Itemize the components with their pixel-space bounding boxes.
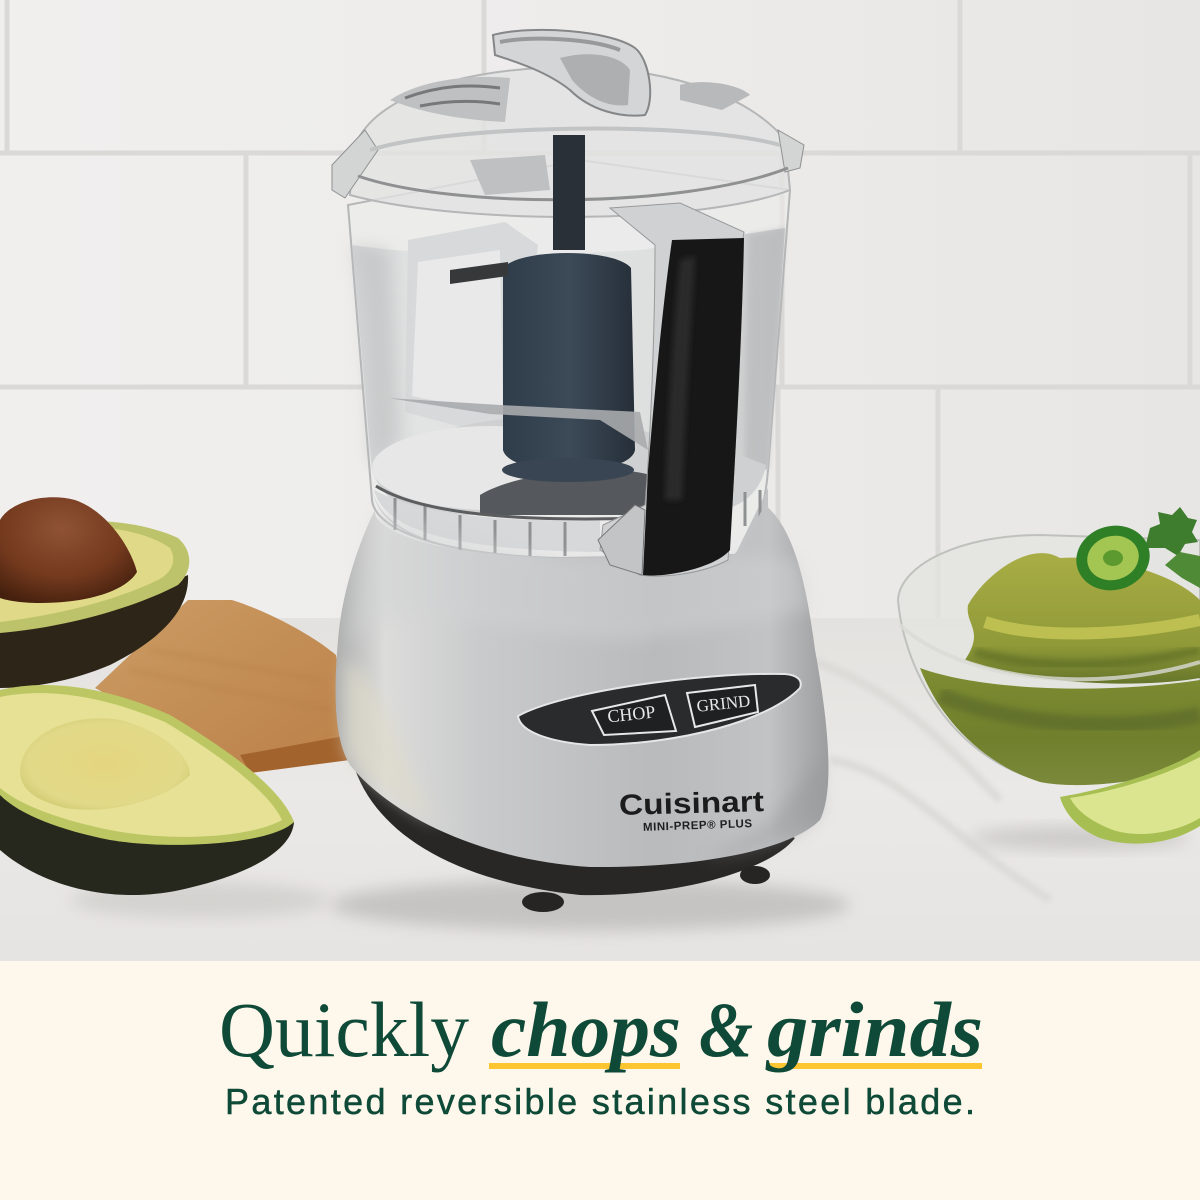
feet and dark bottom [352,760,795,912]
subheading: Patented reversible stainless steel blade. [225,1081,975,1122]
lid [332,30,804,250]
brand logo: Cuisinart [619,786,765,822]
lid chute [493,30,650,116]
motor shaft [388,253,648,482]
jalapeno slice [1069,518,1157,598]
highlight underlines [489,1063,982,1069]
black handle [598,203,744,576]
silver base [336,505,828,867]
lime wedge [1060,750,1200,844]
guacamole bowl [898,507,1200,785]
model name: MINI-PREP® PLUS [643,818,753,834]
cilantro [1145,507,1200,588]
headline: chops [491,986,681,1073]
button: chop: CHOP [606,702,656,726]
control panel [518,674,801,745]
button: chop [592,695,676,735]
headline: grinds [765,986,983,1073]
cutting board [95,600,350,773]
headline: & [699,986,753,1073]
button: grind: GRIND [696,691,751,716]
bowl body [348,160,790,558]
avocado half with pit [0,497,189,688]
food processor [332,30,828,912]
caption band [0,961,1200,1200]
button: grind [687,685,758,727]
avocado half with hollow [0,685,294,895]
headline: Quickly [219,986,469,1073]
